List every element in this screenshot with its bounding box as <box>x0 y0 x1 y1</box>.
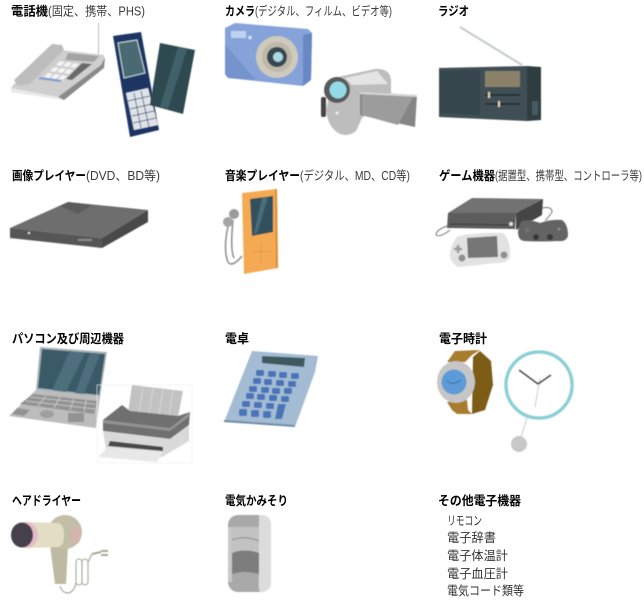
icon: flip mobile phone <box>113 32 159 137</box>
list: other electronics items <box>447 514 524 598</box>
heading: electric shaver: 電気かみそり <box>225 493 288 508</box>
heading: video players: (DVD、BD等) <box>86 168 160 183</box>
panel: radio <box>438 4 541 121</box>
panel: video players <box>10 168 160 248</box>
heading: other electronics: その他電子機器 <box>438 493 521 508</box>
heading: calculator: 電卓 <box>225 331 249 346</box>
list: other electronics items: 電子体温計 <box>447 548 508 563</box>
heading: game consoles <box>439 168 642 183</box>
panel: hair dryer <box>11 494 108 593</box>
list: other electronics items: リモコン <box>447 514 482 528</box>
heading: telephones: 電話機 <box>11 4 48 18</box>
icon: home console <box>436 198 552 236</box>
icon: portable music player <box>223 189 278 274</box>
icon: game controller <box>518 220 568 242</box>
icon: video camera <box>321 69 417 135</box>
icon: calculator <box>224 351 318 427</box>
heading: cameras <box>225 4 392 18</box>
list: other electronics items: 電子辞書 <box>447 531 496 545</box>
list: other electronics items: 電子血圧計 <box>447 566 508 581</box>
panel: music players <box>223 168 410 274</box>
heading: music players: (デジタル、MD、CD等) <box>300 168 410 183</box>
heading: game consoles: ゲーム機器 <box>439 168 495 183</box>
heading: music players: 音楽プレイヤー <box>225 168 300 183</box>
icon: disc player <box>10 202 148 248</box>
icon: smartphone <box>150 43 195 114</box>
heading: clocks: 電子時計 <box>439 331 487 346</box>
list: other electronics items: 電気コード類等 <box>447 583 524 598</box>
panel: calculator <box>224 331 318 427</box>
heading: music players <box>225 168 410 183</box>
heading: cameras: カメラ <box>225 4 255 18</box>
icon: pendulum wall clock <box>506 352 572 452</box>
panel: clocks <box>437 331 572 452</box>
icon: landline phone <box>11 23 105 100</box>
panel: other electronics <box>438 493 524 598</box>
icon: printer <box>97 385 192 463</box>
icon: laptop <box>9 347 107 428</box>
icon: wristwatch <box>437 350 493 414</box>
icon: radio <box>439 27 541 121</box>
heading: hair dryer: ヘアドライヤー <box>12 494 81 508</box>
icon: electric shaver <box>228 515 271 592</box>
panel: electric shaver <box>225 493 288 592</box>
heading: radio: ラジオ <box>438 4 469 18</box>
icon: hair dryer <box>11 515 108 593</box>
heading: computers: パソコン及び周辺機器 <box>12 331 124 346</box>
panel: game consoles <box>436 168 642 267</box>
heading: telephones <box>11 4 145 18</box>
icon: digital camera <box>225 23 312 86</box>
heading: video players: 画像プレイヤー <box>12 168 86 183</box>
heading: video players <box>12 168 160 183</box>
panel: telephones <box>11 4 195 137</box>
heading: telephones: (固定、携帯、PHS) <box>48 4 145 18</box>
icon: handheld console <box>450 233 510 267</box>
heading: cameras: (デジタル、フィルム、ビデオ等) <box>255 4 392 18</box>
panel: cameras <box>225 4 417 135</box>
panel: computers and peripherals <box>9 331 192 463</box>
